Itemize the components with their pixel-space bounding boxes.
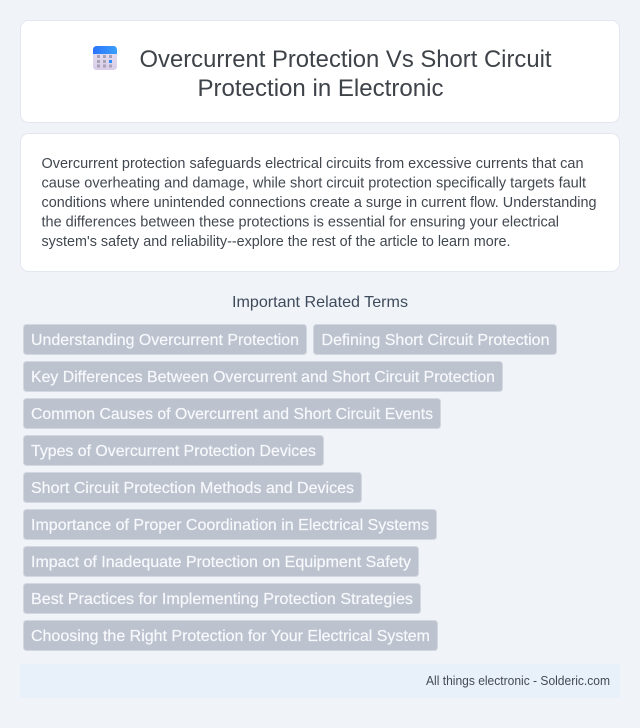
tag [24,436,324,466]
tag: Defining Short Circuit Protection [322,332,550,349]
tag [24,546,418,576]
title [140,46,552,102]
intro paragraph: Overcurrent protection safeguards electrical circuits from excessive currents that can [42,156,584,172]
title: Protection in Electronic [198,75,444,102]
panel: title card [20,20,620,122]
title: Overcurrent Protection Vs Short Circuit [140,46,552,73]
intro paragraph [42,156,596,250]
tag [24,620,438,650]
footer [20,664,620,698]
tag: Short Circuit Protection Methods and Devices [31,480,354,497]
tag: Common Causes of Overcurrent and Short Circuit Events [31,406,433,423]
tag [24,362,502,392]
heading: important related terms: Important Related Terms [232,294,408,311]
tag: Importance of Proper Coordination in Electrical Systems [31,517,429,534]
intro paragraph: the differences between these protections is essential for ensuring your electrical [42,214,559,230]
tag [24,584,420,614]
footer: All things electronic - Solderic.com [426,673,610,688]
tag [314,324,556,354]
tag [24,510,436,540]
intro paragraph: cause overheating and damage, while short circuit protection specifically targets fault [42,176,586,192]
tag: Best Practices for Implementing Protection Strategies [31,591,413,608]
tag [24,398,440,428]
tag: Choosing the Right Protection for Your Electrical System [31,628,430,645]
tag: Understanding Overcurrent Protection [31,332,299,349]
tag: Impact of Inadequate Protection on Equipment Safety [31,554,411,571]
tag [24,324,306,354]
tag [24,472,362,502]
intro paragraph: system's safety and reliability--explore the rest of the article to learn more. [42,234,510,250]
icon: calendar [93,46,117,70]
panel: intro text card [20,134,620,272]
tag: Key Differences Between Overcurrent and Short Circuit Protection [31,369,495,386]
tag: Types of Overcurrent Protection Devices [31,443,316,460]
intro paragraph: conditions where unintended connections create a surge in current flow. Understanding [42,195,596,211]
panel: related terms tags [24,324,556,650]
